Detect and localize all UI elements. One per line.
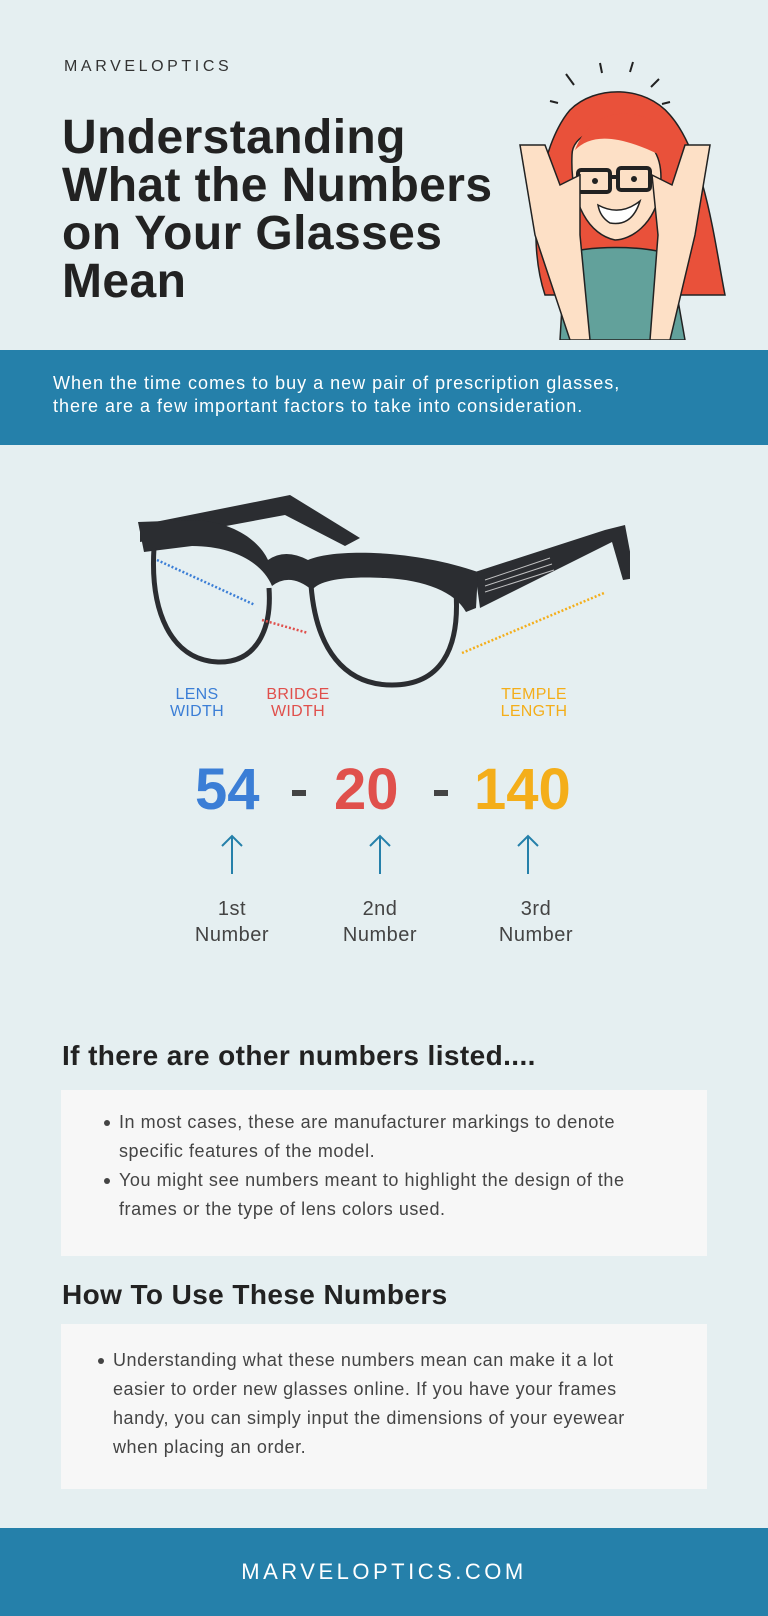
heading: how to use: How To Use These Numbers (62, 1279, 448, 1310)
label: temple length: TEMPLE (501, 686, 567, 703)
label 2nd number (343, 898, 417, 946)
title: What the Numbers (62, 159, 492, 212)
label 1st number: 1st (218, 898, 246, 920)
illustration: girl with glasses (519, 62, 726, 340)
dash (292, 790, 306, 796)
label 3rd number: 3rd (521, 898, 551, 920)
label 2nd number: 2nd (363, 898, 397, 920)
label: bridge width: BRIDGE (266, 686, 330, 703)
dash (434, 790, 448, 796)
label: temple length: LENGTH (501, 703, 567, 720)
heading: other numbers: If there are other numbers listed.... (62, 1040, 536, 1071)
label 3rd number: Number (499, 924, 573, 946)
footer text: MARVELOPTICS.COM (241, 1559, 527, 1584)
arrows up (221, 834, 539, 874)
brand label: MARVELOPTICS (64, 58, 232, 75)
label 2nd number: Number (343, 924, 417, 946)
label: temple length (501, 686, 567, 720)
intro text: When the time comes to buy a new pair of prescription glasses, (53, 373, 620, 393)
label: bridge width: WIDTH (271, 703, 325, 720)
panel: how to use (61, 1324, 707, 1489)
number 140: 140 (474, 757, 571, 822)
number 54: 54 (195, 757, 260, 822)
label: lens width: LENS (176, 686, 218, 703)
label 1st number (195, 898, 269, 946)
label: lens width: WIDTH (170, 703, 224, 720)
number 20: 20 (334, 757, 399, 822)
intro text (53, 373, 620, 416)
intro band (0, 350, 768, 445)
label: bridge width (266, 686, 330, 720)
footer band (0, 1528, 768, 1616)
title: Understanding (62, 111, 406, 164)
label 3rd number (499, 898, 573, 946)
label: lens width (170, 686, 224, 720)
title (62, 111, 492, 308)
label 1st number: Number (195, 924, 269, 946)
panel: other numbers (61, 1090, 707, 1256)
glasses diagram (138, 495, 630, 688)
title: Mean (62, 255, 186, 308)
panel: other numbers: In most cases, these are manufacturer markings to denote specific features of the model. (119, 1112, 615, 1161)
panel: how to use: Understanding what these numbers mean can make it a lot easier to order new glasses online. If you have your frames handy, you can simply input the dimensions of your eyewear when placing an order. (113, 1350, 625, 1457)
intro text: there are a few important factors to take into consideration. (53, 396, 583, 416)
panel: other numbers: You might see numbers meant to highlight the design of the frames or the type of lens colors used. (119, 1170, 625, 1219)
title: on Your Glasses (62, 207, 442, 260)
